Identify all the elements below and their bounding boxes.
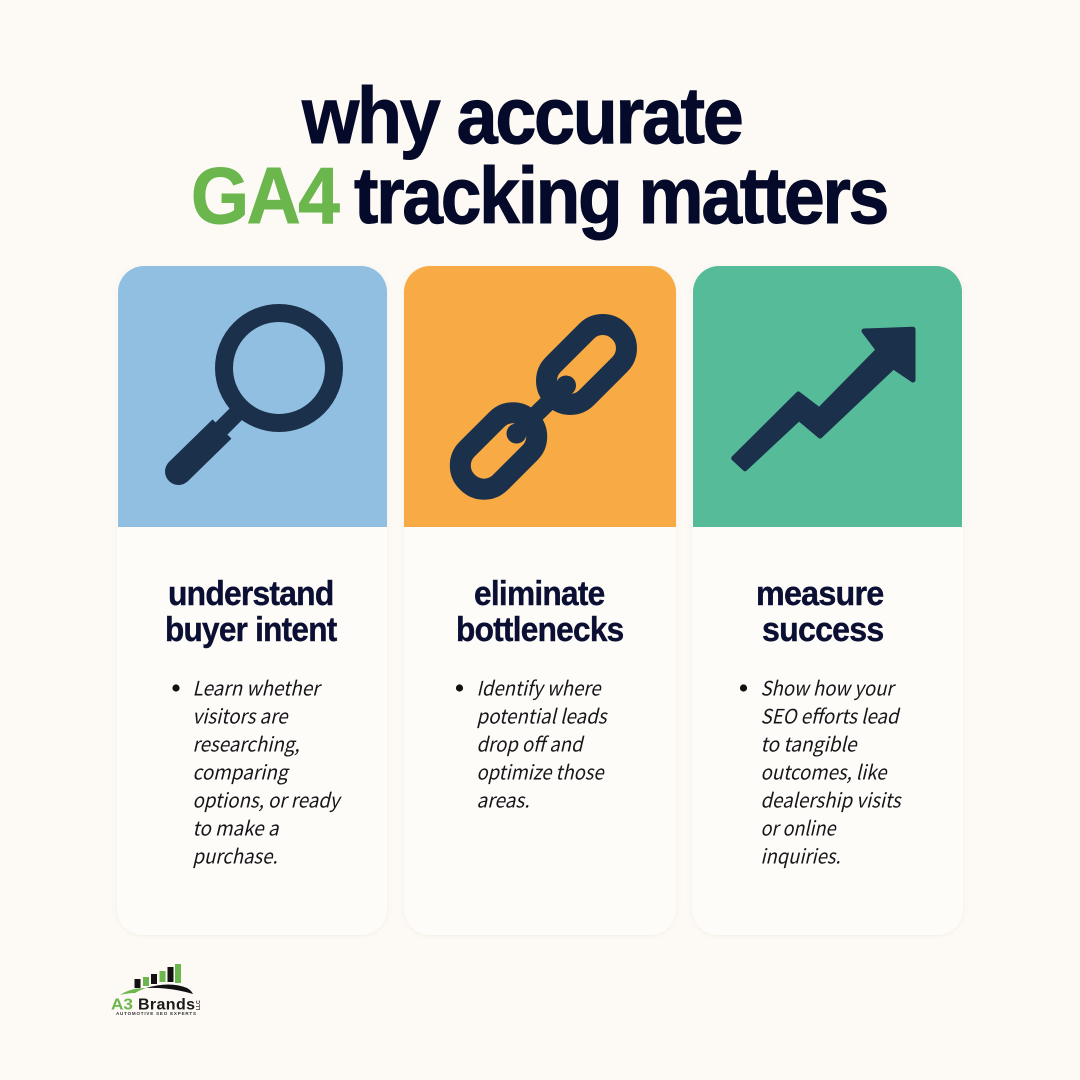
icon panel: orange header (404, 266, 676, 527)
bullet list: potential leads (476, 700, 608, 730)
icon panel: blue header (118, 266, 387, 527)
bullet list: researching, (192, 728, 300, 758)
icon: chain link (451, 315, 636, 499)
bullet list: Learn whether (192, 672, 323, 702)
bullet list: options, or ready (192, 784, 342, 814)
bullet list (740, 672, 902, 870)
logo bars (134, 964, 181, 988)
bullet list: to tangible (760, 728, 858, 758)
bullet list: drop off and (476, 728, 585, 758)
bullet list: dealership visits (760, 784, 902, 814)
bullet list: inquiries. (760, 840, 840, 870)
heading: measure (756, 575, 884, 613)
icon: magnifying glass (165, 313, 334, 485)
logo: A3 Brands (111, 964, 202, 1016)
heading (456, 575, 624, 649)
heading (165, 575, 337, 649)
heading: success (762, 611, 884, 649)
logo: A3 Brands: A3 (111, 996, 133, 1014)
logo: A3 Brands: LLC (196, 1000, 202, 1010)
panel: eliminate bottlenecks (404, 266, 676, 935)
bullet list: or online (760, 812, 837, 842)
panel: understand buyer intent (117, 266, 387, 935)
heading (756, 575, 884, 649)
logo: A3 Brands: Brands (138, 996, 195, 1014)
icon panel: green header (693, 266, 962, 527)
panel: measure success (692, 266, 963, 935)
bullet list: Identify where (476, 672, 602, 702)
title (191, 71, 887, 240)
heading: bottlenecks (456, 611, 624, 649)
bullet list: purchase. (192, 840, 278, 870)
logo car swoosh (120, 984, 193, 995)
bullet list: visitors are (192, 700, 289, 730)
bullet list: comparing (192, 756, 290, 786)
heading: buyer intent (165, 611, 337, 649)
bullet list: SEO efforts lead (760, 700, 901, 730)
logo: A3 Brands: AUTOMOTIVE SEO EXPERTS (116, 1011, 196, 1016)
heading: eliminate (474, 575, 604, 613)
title: tracking matters (354, 151, 887, 240)
bullet list: areas. (476, 784, 530, 814)
heading: understand (168, 575, 334, 613)
bullet list (172, 672, 342, 870)
bullet list (456, 672, 608, 814)
icon: rising arrow (734, 329, 913, 469)
bullet list: Show how your (760, 672, 896, 702)
title: GA4 (191, 151, 340, 240)
title: why accurate (301, 71, 742, 160)
bullet list: outcomes, like (760, 756, 888, 786)
bullet list: to make a (192, 812, 279, 842)
bullet list: optimize those (476, 756, 605, 786)
